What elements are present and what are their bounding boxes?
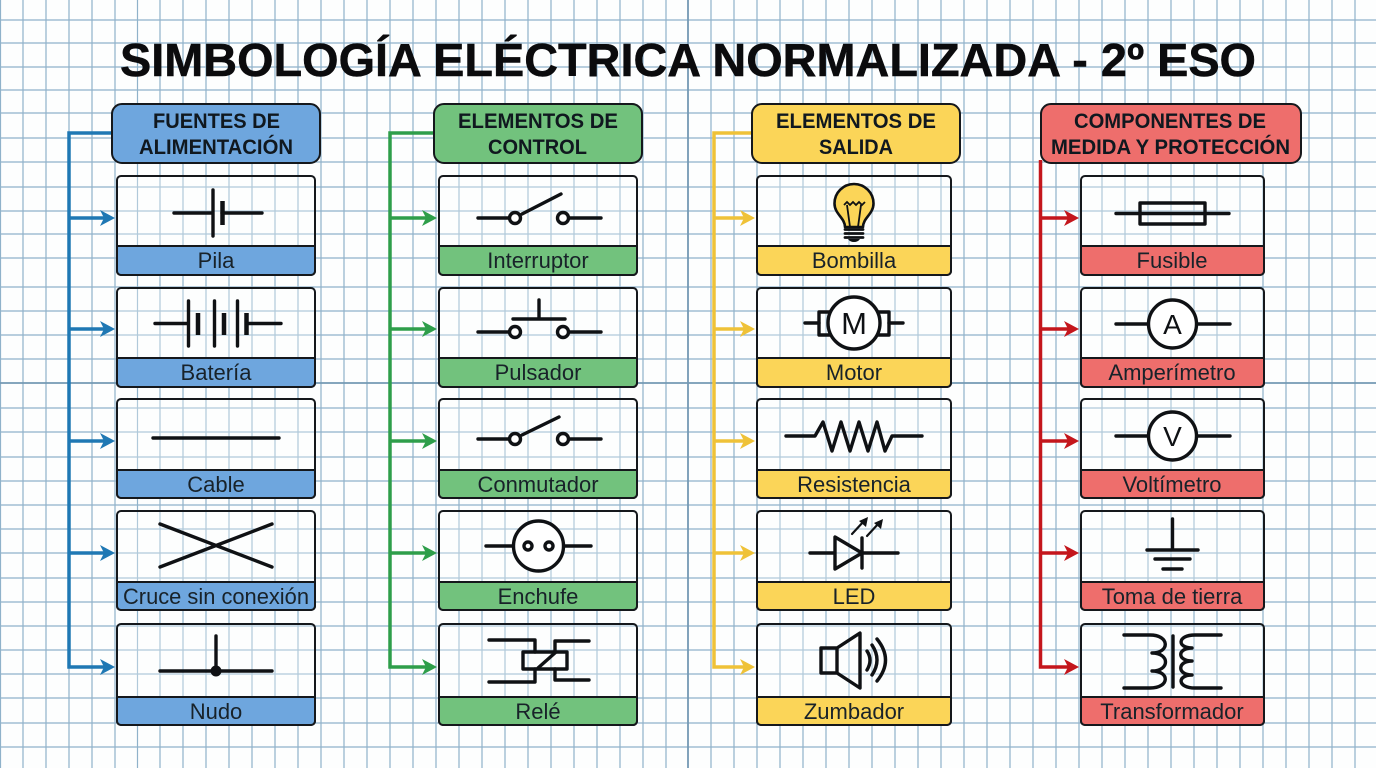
connector arrows: green	[390, 133, 437, 675]
card: Relé	[439, 624, 637, 725]
icon: relé	[489, 640, 589, 682]
connector arrows: yellow	[714, 133, 755, 675]
card: Bombilla	[757, 176, 951, 275]
card: Pila	[117, 176, 315, 275]
heading: elementos de control	[434, 104, 642, 163]
card: LED	[757, 511, 951, 610]
icon: fusible	[1116, 203, 1229, 224]
label: Pulsador: Pulsador	[495, 360, 581, 385]
icon: voltímetro: V	[1163, 421, 1182, 452]
label: Batería: Batería	[181, 360, 252, 385]
card: Voltímetro	[1081, 399, 1264, 498]
card: Cruce sin conexión	[117, 511, 315, 610]
connector arrows: blue	[69, 133, 115, 675]
panel: elementos de salida	[714, 104, 960, 725]
card: Pulsador	[439, 288, 637, 387]
connector arrows: red	[1040, 160, 1079, 675]
heading: elementos de salida: SALIDA	[819, 136, 893, 159]
icon: conmutador	[478, 417, 601, 444]
label: Cable: Cable	[187, 472, 245, 497]
icon: toma de tierra	[1147, 519, 1198, 569]
heading: elementos de salida: ELEMENTOS DE	[776, 110, 936, 133]
label: Enchufe: Enchufe	[498, 584, 578, 609]
icon: pila	[174, 190, 262, 236]
label: Zumbador: Zumbador	[804, 699, 904, 724]
heading: fuentes de alimentación: FUENTES DE	[153, 110, 280, 133]
icon: amperímetro	[1116, 300, 1230, 348]
label: Nudo: Nudo	[190, 699, 242, 724]
card: Cable	[117, 399, 315, 498]
icon: nudo	[160, 636, 272, 676]
icon: motor: M	[841, 306, 867, 341]
label: Relé: Relé	[515, 699, 561, 724]
label: Fusible: Fusible	[1137, 248, 1207, 273]
label: Interruptor: Interruptor	[487, 248, 589, 273]
icon: interruptor	[478, 194, 601, 224]
label: Pila: Pila	[198, 248, 235, 273]
icon: zumbador	[821, 633, 886, 688]
icon: pulsador	[478, 300, 601, 338]
card: Interruptor	[439, 176, 637, 275]
label: Toma de tierra: Toma de tierra	[1102, 584, 1243, 609]
panel: elementos de control	[390, 104, 642, 725]
card: Zumbador	[757, 624, 951, 725]
panel: fuentes de alimentación	[69, 104, 320, 725]
label: Resistencia: Resistencia	[797, 472, 912, 497]
icon: amperímetro: A	[1163, 309, 1182, 340]
card: Toma de tierra	[1081, 511, 1264, 610]
label: Conmutador: Conmutador	[477, 472, 599, 497]
card: Transformador	[1081, 624, 1264, 725]
label: Amperímetro: Amperímetro	[1108, 360, 1236, 385]
title: SIMBOLOGÍA ELÉCTRICA NORMALIZADA - 2º ESO	[120, 34, 1256, 86]
icon: cruce	[160, 524, 272, 567]
heading: elementos de control: ELEMENTOS DE	[458, 110, 618, 133]
icon: bombilla	[834, 184, 874, 242]
label: Motor: Motor	[826, 360, 882, 385]
card: Enchufe	[439, 511, 637, 610]
icon: voltímetro	[1116, 412, 1230, 460]
icon: enchufe	[486, 521, 591, 571]
card: Batería	[117, 288, 315, 387]
label: Bombilla: Bombilla	[812, 248, 897, 273]
icon: motor	[805, 297, 903, 349]
icon: cable	[153, 436, 279, 440]
label: LED: LED	[833, 584, 875, 609]
heading: elementos de salida	[752, 104, 960, 163]
heading: componentes de medida y protección: COMPONENTES DE	[1074, 110, 1266, 133]
heading: elementos de control: CONTROL	[488, 136, 587, 159]
card: Resistencia	[757, 399, 951, 498]
heading: fuentes de alimentación	[112, 104, 320, 163]
panel: componentes de medida y protección	[1040, 104, 1301, 725]
label: Cruce sin conexión: Cruce sin conexión	[123, 584, 309, 609]
card: Conmutador	[439, 399, 637, 498]
icon: LED	[810, 517, 898, 569]
heading: componentes de medida y protección	[1041, 104, 1301, 163]
label: Transformador: Transformador	[1100, 699, 1244, 724]
label: Voltímetro: Voltímetro	[1122, 472, 1222, 497]
card: Amperímetro	[1081, 288, 1264, 387]
icon: transformador	[1124, 635, 1221, 688]
heading: componentes de medida y protección: MEDIDA Y PROTECCIÓN	[1051, 135, 1290, 159]
icon: resistencia	[786, 422, 922, 451]
card: Motor	[757, 288, 951, 387]
card: Fusible	[1081, 176, 1264, 275]
heading: fuentes de alimentación: ALIMENTACIÓN	[139, 135, 293, 159]
icon: batería	[155, 301, 281, 346]
card: Nudo	[117, 624, 315, 725]
